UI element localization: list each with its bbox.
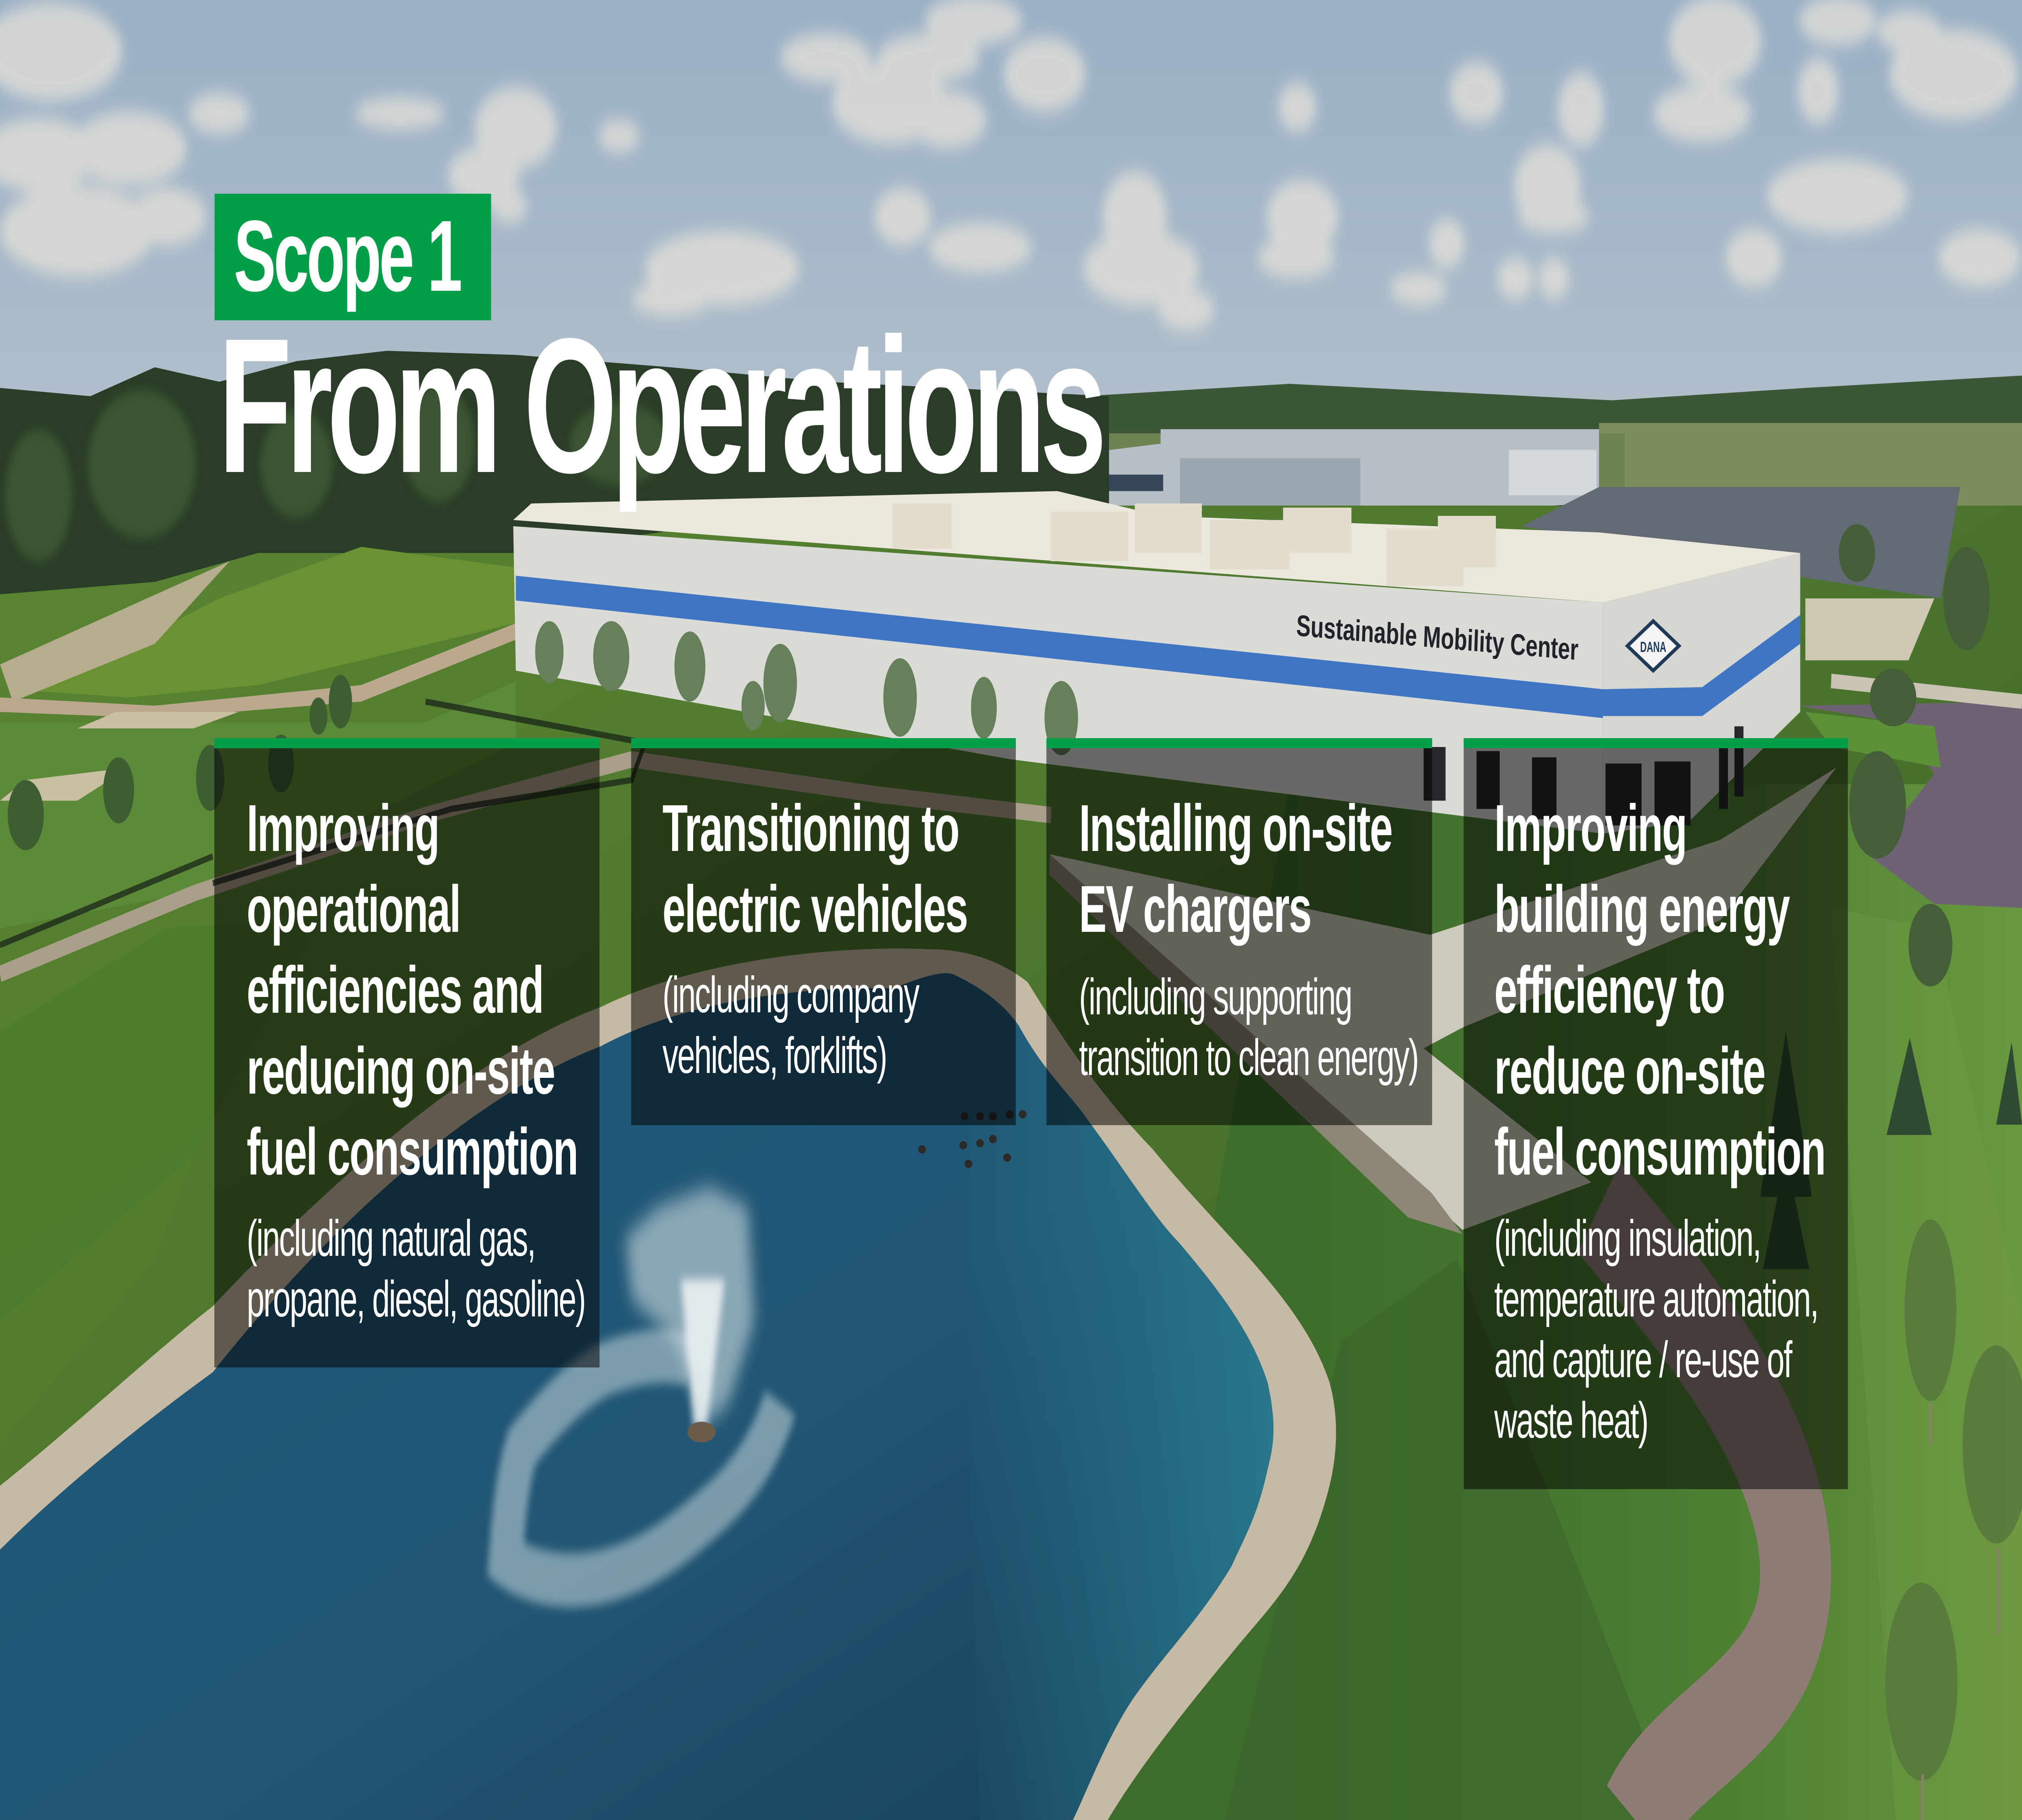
heading: electric vehicles: Transitioning to	[662, 791, 959, 865]
heading: electric vehicles: electric vehicles	[662, 872, 967, 946]
heading: building energy efficiency: reduce on-site	[1494, 1033, 1765, 1108]
garden path and fence	[0, 702, 1051, 974]
Sustainable Mobility Center building	[513, 491, 1800, 834]
Dana logo: DANA	[1640, 639, 1666, 656]
Scope 1 badge: Scope 1	[234, 200, 461, 313]
front wall	[513, 526, 1603, 834]
heading: building energy efficiency: efficiency to	[1494, 952, 1724, 1027]
heading: operational efficiencies: operational	[247, 872, 460, 946]
detail: clean energy: (including supporting	[1079, 969, 1352, 1026]
panel: electric vehicles	[631, 738, 1016, 1125]
detail: insulation and heat: temperature automation,	[1494, 1271, 1818, 1328]
heading: EV chargers: Installing on-site	[1079, 791, 1392, 865]
pond with stone shore	[0, 948, 1336, 1820]
heading: building energy efficiency: fuel consumption	[1494, 1114, 1825, 1189]
detail: insulation and heat: (including insulation,	[1494, 1210, 1760, 1267]
title: From Operations	[218, 298, 1102, 514]
concrete terrace and walkway	[1050, 768, 1836, 1234]
left hill	[0, 547, 516, 929]
parking lot far	[1522, 487, 1960, 599]
clouds	[0, 0, 2021, 330]
lawn mowing bands	[0, 908, 2022, 1820]
panel: operational efficiencies	[214, 738, 599, 1367]
landscape trees	[8, 524, 2022, 1820]
parking lot near and driveway	[1798, 599, 2022, 908]
detail: vehicles: (including company	[662, 967, 920, 1024]
fountain spray	[506, 1187, 780, 1580]
heading: operational efficiencies: Improving	[247, 791, 439, 865]
walking path	[1599, 1207, 1796, 1820]
heading: building energy efficiency: building energy	[1494, 872, 1790, 946]
windows	[1423, 726, 1743, 825]
detail: vehicles: vehicles, forklifts)	[662, 1027, 886, 1084]
heading: operational efficiencies: fuel consumption	[247, 1114, 577, 1189]
blue stripe	[516, 576, 1800, 718]
side wall	[1603, 553, 1800, 834]
detail: fuels: propane, diesel, gasoline)	[247, 1271, 585, 1328]
left tree mass	[0, 351, 1109, 594]
detail: insulation and heat: waste heat)	[1494, 1392, 1648, 1449]
sky	[0, 0, 2022, 495]
detail: fuels: (including natural gas,	[247, 1210, 535, 1267]
distant tree line	[1083, 376, 2022, 506]
rooftop units	[893, 504, 1496, 586]
detail: clean energy: transition to clean energy)	[1079, 1029, 1418, 1086]
heading: operational efficiencies: efficiencies and	[247, 952, 543, 1027]
heading: EV chargers: EV chargers	[1079, 872, 1311, 946]
distant factory buildings	[1045, 429, 1599, 516]
heading: building energy efficiency: Improving	[1494, 791, 1686, 865]
panel: building energy efficiency	[1464, 738, 1848, 1489]
building sign text: Sustainable Mobility Center	[1296, 609, 1579, 667]
Dana logo	[1627, 621, 1679, 671]
geese	[918, 1110, 1026, 1168]
ground base	[0, 506, 2022, 1820]
roof	[513, 491, 1800, 603]
panel: EV chargers	[1047, 738, 1432, 1125]
heading: operational efficiencies: reducing on-site	[247, 1033, 554, 1108]
detail: insulation and heat: and capture / re-use of	[1494, 1331, 1793, 1388]
